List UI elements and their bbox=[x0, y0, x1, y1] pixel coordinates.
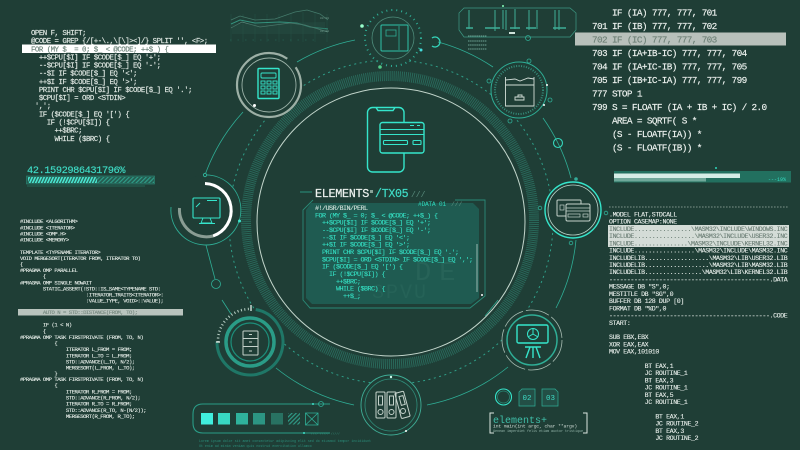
code block: top right: (S - FLOATF(IB)) * bbox=[592, 142, 702, 154]
elements+ tag: elements+ bbox=[493, 415, 547, 427]
swatch caption: Lorem ipsum dolor sit amet consectetur adipiscing elit sed do eiusmod tempor incididunt bbox=[199, 439, 371, 443]
center panel bbox=[300, 188, 498, 316]
code block: bottom left: #INCLUDE <MEMORY> bbox=[20, 236, 70, 244]
code block: top right: 777 STOP 1 bbox=[592, 88, 643, 100]
center panel: IF ($CODE[$_] EQ '[') { bbox=[315, 264, 403, 272]
code block: bottom right: BT EAX,3 bbox=[609, 428, 684, 435]
central ring system bbox=[205, 37, 576, 405]
panel code: #!/USR/BIN/PERL bbox=[315, 205, 368, 213]
code block: bottom left: #INCLUDE <ITERATOR> bbox=[20, 224, 76, 231]
gray highlight bar bbox=[575, 32, 786, 46]
center panel: --$I IF $CODE[$_] EQ '<'; bbox=[315, 234, 409, 242]
code block: bottom left: #PRAGMA OMP SINGLE NOWAIT bbox=[20, 279, 93, 286]
code block: bottom left: STD::ADVANCE(R_FROM, N/2); bbox=[20, 395, 141, 402]
center panel: ++$I IF $CODE[$_] EQ '>'; bbox=[315, 242, 409, 250]
center panel: ++$BRC; bbox=[315, 278, 360, 286]
code block: bottom right: ---------------------------------------------.DATA bbox=[609, 276, 788, 283]
code block: bottom right: BT EAX,5 bbox=[609, 392, 674, 399]
code block: top right: 705 IF (IB+IC-IA) 777, 777, 799 bbox=[592, 75, 747, 86]
icon: monitor bbox=[171, 173, 241, 245]
code block: bottom left bbox=[18, 218, 183, 420]
code block: top left: ++$I IF $CODE[$_] EQ '>'; bbox=[31, 79, 137, 87]
code block: top left: ++$BRC; bbox=[31, 128, 82, 136]
code block: top right: 799 S = FLOATF (IA + IB + IC) / 2.0 bbox=[592, 102, 768, 113]
code block: bottom left: #INCLUDE <OMP.H> bbox=[20, 230, 67, 237]
code block: bottom right: BUFFER DB 128 DUP [0] bbox=[609, 298, 684, 305]
icon: calculator bbox=[237, 53, 301, 117]
code block: top left: IF (!$CPU[$I]) { bbox=[31, 120, 110, 128]
icon: file cabinet bbox=[212, 304, 288, 380]
gray highlight bar bbox=[18, 309, 183, 316]
color swatches panel: //// ///// ///// bbox=[311, 432, 340, 436]
code block: bottom right: OPTION CASEMAP:NONE bbox=[609, 219, 677, 226]
code block: bottom left: { bbox=[20, 328, 46, 335]
code block: bottom left: STATIC_ASSERT(!STD::IS_SAME<TYPENAME STD: bbox=[20, 285, 160, 292]
code block: bottom left: #INCLUDE <ALGORITHM> bbox=[20, 218, 78, 225]
code block: bottom right: INCLUDELIB..................\MASM32\LIB\MASM32.LIB bbox=[609, 262, 788, 269]
status bars: right bbox=[614, 167, 791, 183]
code block: bottom left: STD::ADVANCE(L_TO, N/2); bbox=[20, 358, 135, 365]
code block: top left bbox=[22, 30, 216, 144]
highlight bar bbox=[22, 44, 216, 53]
center panel: $CPU[$I] = ORD <STDIN> IF $CODE[$_] EQ ','; bbox=[315, 256, 472, 264]
code block: top right: (S - FLOATF(IA)) * bbox=[592, 129, 702, 140]
code block: bottom left: } bbox=[20, 371, 57, 378]
code block: bottom left: ITERATOR R_TO = R_FROM; bbox=[20, 401, 132, 408]
center panel: FOR (MY $_ = 0; $_ < @CODE; ++$_) { bbox=[315, 212, 438, 220]
code block: bottom left: { bbox=[20, 273, 46, 280]
icon: binders bbox=[361, 375, 421, 435]
code block: top left: ','; bbox=[31, 103, 51, 111]
code block: top left: IF ($CODE[$_] EQ '[') { bbox=[31, 112, 129, 120]
code block: bottom left: { bbox=[20, 382, 57, 389]
icon: phone and card bbox=[368, 108, 424, 172]
center panel: IF (!$CPU[$I]) { bbox=[315, 271, 385, 279]
code block: top left: $CPU[$I] = ORD <STDIN> bbox=[31, 95, 126, 103]
code block: bottom left: #PRAGMA OMP TASK FIRSTPRIVATE (FROM, TO, N) bbox=[20, 334, 143, 341]
technical frame: top right bbox=[459, 5, 576, 49]
code block: bottom left: STD::ADVANCE(R_TO, N-(N/2)); bbox=[20, 407, 146, 414]
elements+ tag: int main(int argc, char **argv) bbox=[493, 424, 577, 430]
elements+ tag: Aenean imperdiet felis etiam auctor tristique bbox=[493, 429, 583, 434]
center panel: SPVU bbox=[372, 282, 428, 305]
code block: bottom left: #PRAGMA OMP TASK FIRSTPRIVATE (FROM, TO, N) bbox=[20, 376, 143, 383]
elements+ tag bbox=[490, 413, 587, 434]
code block: top right: 704 IF (IA+IC-IB) 777, 777, 705 bbox=[592, 62, 748, 72]
code block: top left: @CODE = GREP {/[+-\.,\[\]><]/} SPLIT '', <F>; bbox=[31, 38, 208, 46]
code block: bottom right: JC ROUTINE_1 bbox=[609, 399, 688, 406]
code block: top left: --$I IF $CODE[$_] EQ '<'; bbox=[31, 71, 137, 79]
code block: top right: IF (IA) 777, 777, 701 bbox=[592, 8, 718, 18]
code block: bottom left: AUTO N = STD::DISTANCE(FROM, TO); bbox=[20, 309, 138, 316]
code block: bottom left: { bbox=[20, 340, 57, 347]
progress readout bbox=[26, 165, 154, 186]
code block: top left: FOR (MY $_ = 0; $_ < @CODE; ++$_) { bbox=[31, 46, 168, 54]
code block: bottom left: ITERATOR L_TO = L_FROM; bbox=[20, 352, 132, 359]
code block: bottom left: TEMPLATE <TYPENAME ITERATOR> bbox=[20, 249, 101, 256]
code block: bottom right: BT EAX,3 bbox=[609, 377, 674, 384]
code block: bottom right: ---------------------------------------------.CODE bbox=[609, 312, 788, 320]
code block: bottom right: MOV EAX,101010 bbox=[609, 349, 659, 356]
code block: bottom right: JC ROUTINE_2 bbox=[609, 435, 699, 442]
icon: book bbox=[360, 10, 422, 69]
title: ELEMENTS bbox=[315, 188, 369, 201]
code block: bottom right: INCLUDE................\MASM32\INCLUDE\WINDOWS.INC bbox=[609, 226, 788, 233]
code block: bottom right: SUB EBX,EBX bbox=[609, 334, 649, 341]
code block: bottom right: FORMAT DB "%D",0 bbox=[609, 305, 667, 312]
line chart: top bbox=[230, 10, 329, 42]
code block: bottom left: #PRAGMA OMP PARALLEL bbox=[20, 267, 77, 274]
line chart: top: 00:00 bbox=[320, 30, 329, 33]
status bars: right: ---19% bbox=[768, 177, 786, 183]
center panel: ++$CPU[$I] IF $CODE[$_] EQ '+'; bbox=[315, 220, 430, 228]
code block: bottom left: :VALUE_TYPE, VOID>::VALUE); bbox=[20, 298, 163, 305]
swatch caption bbox=[199, 439, 371, 448]
code block: bottom left: { bbox=[20, 261, 23, 268]
code block: top right: AREA = SQRTF( S * bbox=[592, 116, 697, 126]
code block: bottom left: :ITERATOR_TRAITS<ITERATOR>: bbox=[20, 292, 163, 298]
code block: bottom right: INCLUDELIB..................\MASM32\LIB\USER32.LIB bbox=[609, 255, 788, 262]
code block: top right bbox=[575, 8, 786, 154]
center panel: ++$_; bbox=[315, 293, 360, 301]
code block: bottom right: START: bbox=[609, 320, 630, 327]
code block: top right: 703 IF (IA+IB-IC) 777, 777, 704 bbox=[592, 48, 748, 59]
code block: bottom right: BT EAX,1 bbox=[609, 413, 684, 420]
progress readout: 42.1592986431796% bbox=[27, 165, 126, 177]
number badges bbox=[496, 389, 558, 406]
code block: bottom right: JC ROUTINE_2 bbox=[609, 421, 699, 428]
code block: bottom right: MESTITLE DB "SG",0 bbox=[609, 291, 674, 298]
code block: bottom left: MERGESORT(L_FROM, L_TO); bbox=[20, 364, 135, 372]
color swatches panel bbox=[193, 402, 340, 436]
highlight block bbox=[608, 225, 789, 247]
code block: bottom left: ITERATOR R_FROM = FROM; bbox=[20, 388, 132, 396]
code block: top left: --$CPU[$I] IF $CODE[$_] EQ '-'; bbox=[31, 62, 161, 70]
code block: bottom right: INCLUDE.................\MASM32\INCLUDE\MASM32.INC bbox=[609, 248, 788, 254]
code block: bottom left: ITERATOR L_FROM = FROM; bbox=[20, 346, 132, 353]
icon: credit cards bbox=[538, 177, 608, 245]
code block: bottom right bbox=[608, 207, 789, 442]
icon: drawer bbox=[487, 59, 552, 123]
code block: bottom right: BT EAX,1 bbox=[609, 363, 674, 370]
center panel: #DATA 01 bbox=[418, 201, 446, 208]
center panel: /// bbox=[451, 201, 463, 208]
code block: bottom right: INCLUDE...............\MASM32\INCLUDE\KERNEL32.INC bbox=[609, 240, 788, 247]
code block: top left: WHILE ($BRC) { bbox=[31, 136, 110, 144]
center panel: /// bbox=[411, 191, 426, 200]
number badges: 03 bbox=[546, 395, 556, 403]
center panel: PRINT CHR $CPU[$I] IF $CODE[$_] EQ '.'; bbox=[315, 249, 458, 257]
code block: top left: ++$CPU[$I] IF $CODE[$_] EQ '+'; bbox=[31, 54, 161, 62]
code block: bottom right: INCLUDE.................\MASM32\INCLUDE\USER32.INC bbox=[609, 233, 788, 240]
center panel: /TX05 bbox=[375, 188, 409, 201]
code block: bottom left: IF (1 < N) bbox=[20, 322, 72, 329]
watermark: DE bbox=[415, 259, 463, 289]
icon: presentation board bbox=[502, 310, 562, 370]
code block: bottom right: INCLUDELIB................\MASM32\LIB\KERNEL32.LIB bbox=[609, 269, 788, 276]
code block: bottom right: MESSAGE DB "S",0; bbox=[609, 284, 670, 291]
code block: bottom right: JC ROUTINE_1 bbox=[609, 385, 688, 392]
code block: bottom right: JC ROUTINE_1 bbox=[609, 370, 688, 377]
swatch caption: Ut enim ad minim veniam quis nostrud exercitation ullamco bbox=[199, 444, 312, 448]
code block: top right: 701 IF (IB) 777, 777, 702 bbox=[592, 21, 717, 32]
number badges: 02 bbox=[522, 395, 532, 403]
center panel: --$CPU[$I] IF $CODE[$_] EQ '-'; bbox=[315, 227, 430, 235]
code block: bottom left: VOID MERGESORT(ITERATOR FROM, ITERATOR TO) bbox=[20, 255, 141, 262]
center panel: WHILE ($BRC) { bbox=[315, 286, 385, 294]
code block: bottom right: XOR EAX,EAX bbox=[609, 341, 649, 348]
line chart: top: 00:00 bbox=[320, 17, 329, 20]
code block: bottom left: MERGESORT(R_FROM, R_TO); bbox=[20, 413, 135, 420]
code block: top left: PRINT CHR $CPU[$I] IF $CODE[$_] EQ '.'; bbox=[31, 87, 192, 95]
code block: bottom right: .MODEL FLAT,STDCALL bbox=[609, 212, 677, 218]
code block: top right: 702 IF (IC) 777, 777, 703 bbox=[592, 34, 718, 46]
code block: top left: OPEN F, SHIFT; bbox=[31, 30, 86, 38]
